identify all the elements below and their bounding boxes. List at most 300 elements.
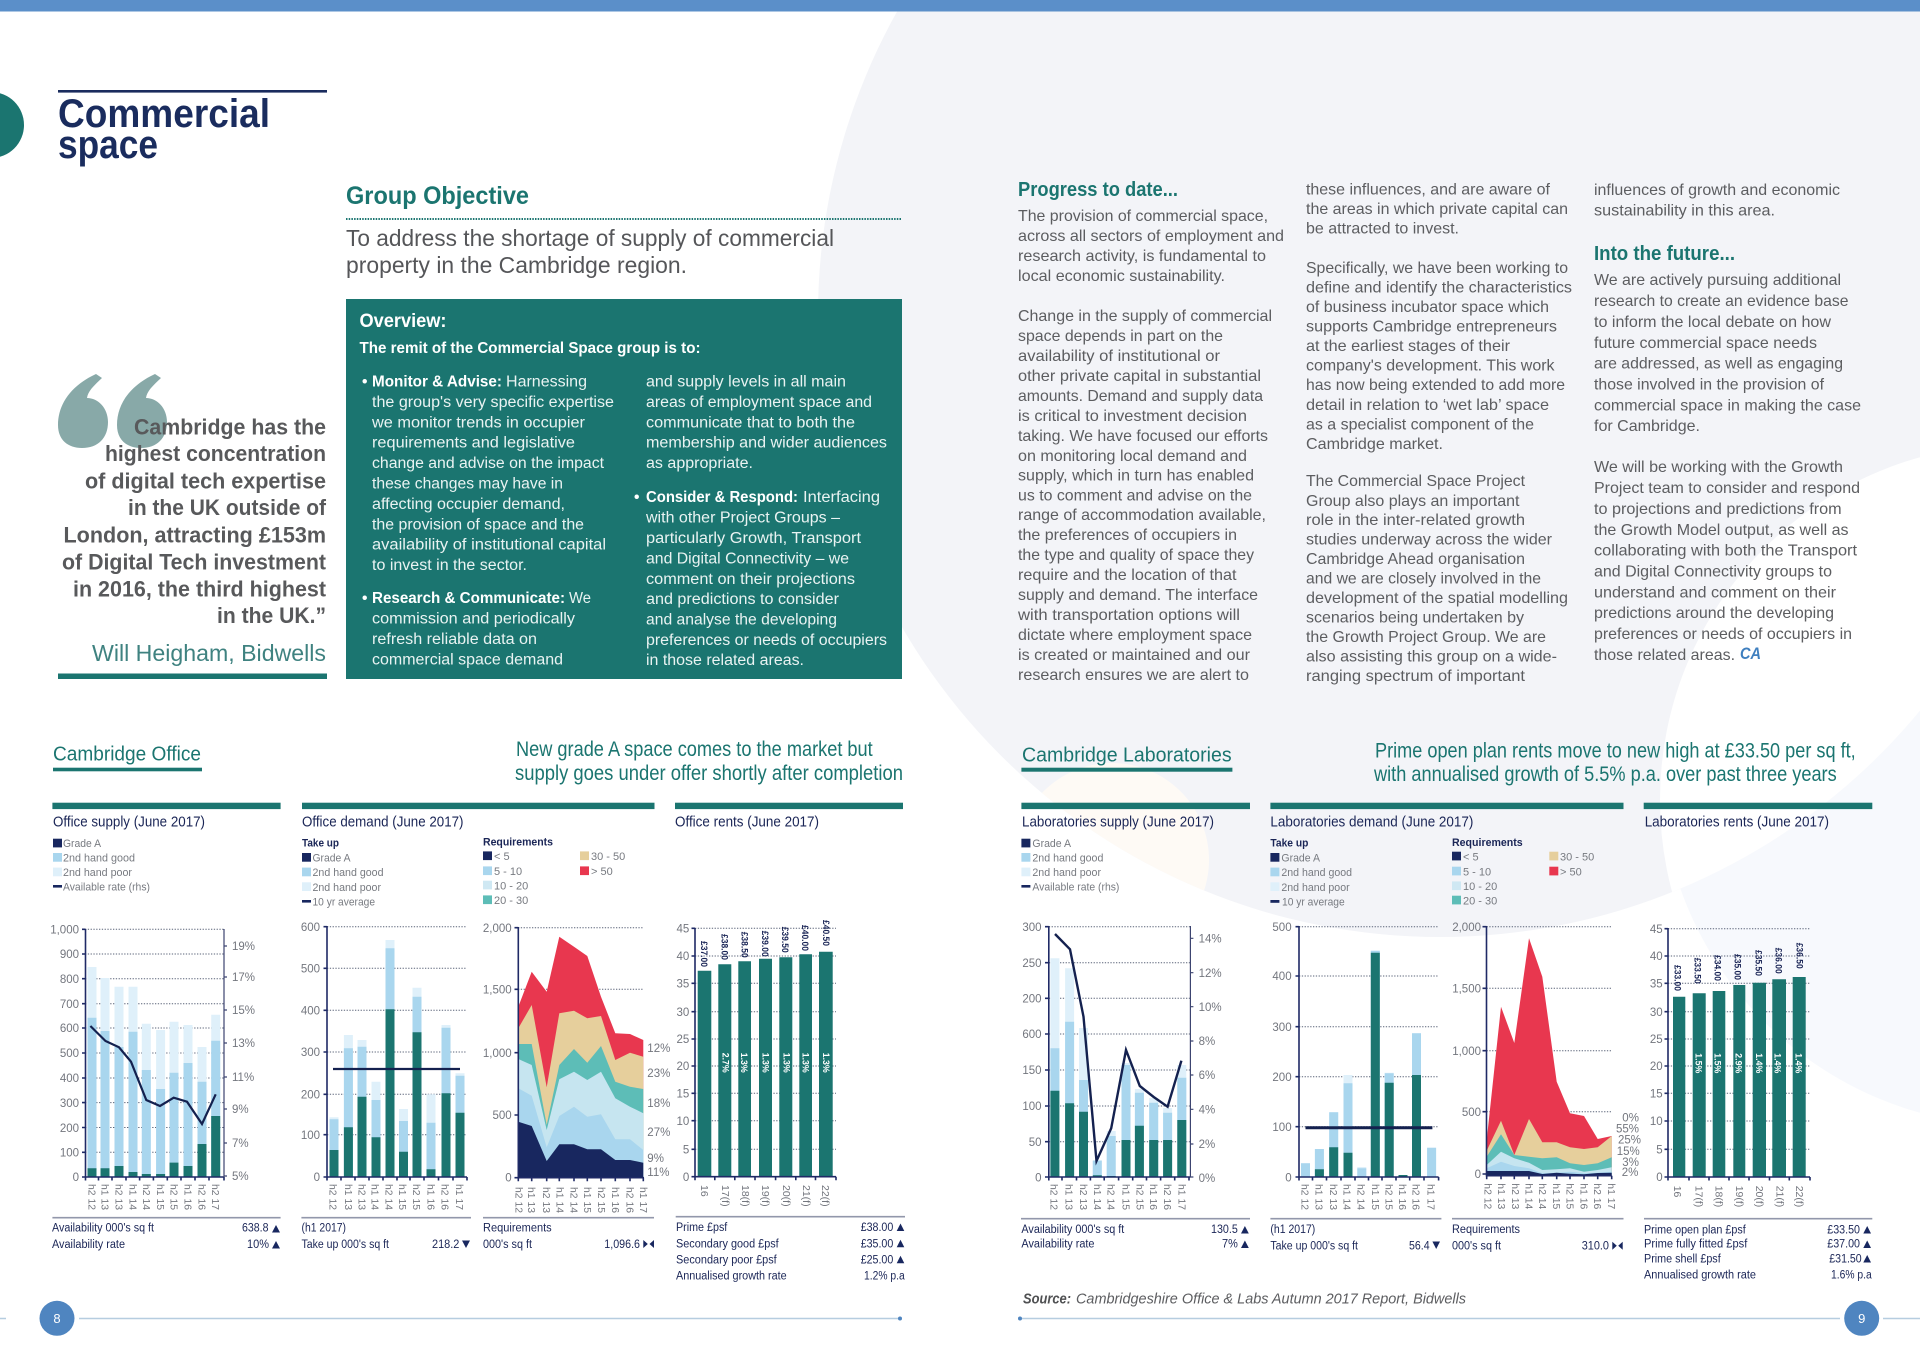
text: progress to date: require and the location of that	[1018, 567, 1237, 584]
text: into the future: commercial space in making the case	[1594, 398, 1861, 414]
bar chart: office supply: 200	[60, 1123, 79, 1135]
text: progress to date: range of accommodation available,	[1018, 507, 1266, 524]
panel: overview: Harnessing	[506, 374, 587, 390]
bar chart: laboratories supply: 50	[1029, 1137, 1042, 1149]
panel: overview: the provision of space and the	[372, 516, 584, 533]
text: progress column 2: also assisting this group on a wide-	[1306, 648, 1557, 666]
text: progress column 2: of business incubator space which	[1306, 299, 1549, 316]
text: into the future: sustainability in this area.	[1594, 202, 1775, 220]
panel: overview: and predictions to consider	[646, 591, 839, 608]
stats: office demand: Take up 000's sq ft	[302, 1239, 390, 1251]
bar chart: office supply: 19%	[232, 941, 255, 953]
bar chart: laboratories rents: 22(f)	[1793, 1186, 1805, 1207]
legend: requirements	[483, 837, 625, 907]
title	[58, 90, 327, 167]
panel: overview: membership and wider audiences	[646, 435, 887, 452]
bar chart: laboratories supply: 100	[1022, 1101, 1042, 1113]
area chart: laboratories requirements: h2 15	[1564, 1183, 1576, 1209]
bar chart: laboratories supply: h1 17	[1175, 1184, 1187, 1210]
bar chart: laboratories rents: 1.4%	[1773, 1053, 1783, 1073]
area chart: office requirements: h2 13	[540, 1187, 552, 1213]
bar chart: office rents: 40	[677, 951, 689, 963]
stats: laboratories supply	[1021, 1219, 1250, 1251]
text: progress column 2: company's development. This work	[1306, 358, 1555, 375]
legend: requirements: > 50	[591, 866, 613, 878]
bar chart: office take up: h1 13	[342, 1184, 354, 1210]
area chart: office requirements: h2 16	[624, 1187, 636, 1213]
bar chart: office rents: 15	[677, 1088, 689, 1100]
bar chart: laboratories take up: 100	[1272, 1122, 1292, 1134]
bar chart: laboratories supply: 0	[1035, 1172, 1042, 1184]
panel: overview: We	[569, 590, 591, 607]
bar chart: laboratories supply: h2 16	[1161, 1184, 1173, 1210]
panel: overview	[346, 299, 902, 679]
text: progress to date: us to comment and advise on the	[1018, 488, 1252, 504]
bar chart: office supply: h1 13	[98, 1184, 110, 1210]
legend: 2nd hand good	[1032, 852, 1103, 864]
bar chart: laboratories supply: 4%	[1199, 1104, 1215, 1116]
text: progress column 2: supports Cambridge entrepreneurs	[1306, 319, 1557, 336]
group objective: To address the shortage of supply of commercial	[346, 225, 834, 251]
text: progress to date: is critical to investment decision	[1018, 408, 1247, 425]
text: progress to date: with transportation options will	[1017, 607, 1240, 624]
legend: take up: 10 yr average	[312, 896, 375, 908]
bar chart: office rents: 20(f)	[780, 1185, 792, 1207]
area chart: office requirements: h1 13	[525, 1187, 537, 1213]
text: into the future: understand and comment on their	[1594, 584, 1837, 602]
text: into the future: Into the future...	[1594, 243, 1735, 265]
legend: take up: Take up	[1270, 838, 1309, 850]
bar chart: office rents: 1.3%	[801, 1053, 811, 1073]
text: progress to date: amounts. Demand and supply data	[1018, 388, 1263, 405]
bar chart: laboratories rents: £36.50	[1793, 943, 1804, 969]
title: space	[58, 123, 158, 167]
bar chart: laboratories supply: h1 13	[1063, 1184, 1075, 1210]
text: progress column 2	[1306, 182, 1572, 685]
text: into the future: collaborating with both the Transport	[1594, 543, 1858, 560]
bar chart: office take up: 100	[301, 1130, 320, 1142]
panel: overview: •	[634, 489, 639, 506]
text: into the future: the Growth Model output, as well as	[1594, 522, 1848, 539]
area chart: office requirements: 23%	[647, 1068, 670, 1080]
legend: take up: 2nd hand good	[312, 867, 384, 879]
legend: requirements: 20 - 30	[494, 895, 528, 907]
bar chart: laboratories rents: 18(f)	[1712, 1186, 1724, 1207]
legend: requirements: 30 - 50	[1560, 851, 1594, 863]
stats: laboratories rents: £37.00	[1827, 1239, 1860, 1251]
text: progress to date: Change in the supply of commercial	[1018, 308, 1272, 325]
bar chart: office supply: 400	[60, 1073, 79, 1085]
bar chart: office rents: 17(f)	[719, 1185, 731, 1207]
stats: office supply: Availability rate	[52, 1239, 125, 1251]
legend: requirements: Requirements	[1452, 837, 1523, 849]
bar chart: laboratories supply: 2%	[1199, 1139, 1215, 1151]
bar chart: laboratories take up: 0	[1285, 1172, 1292, 1184]
stats: laboratories rents: £33.50	[1827, 1224, 1860, 1236]
bar chart: laboratories rents: 1.4%	[1754, 1053, 1764, 1073]
stats: laboratories demand: 310.0	[1582, 1240, 1609, 1252]
page footer left	[0, 1301, 902, 1336]
bar chart: laboratories rents: £34.00	[1711, 955, 1722, 981]
area chart: laboratories requirements: h1 13	[1495, 1183, 1507, 1209]
panel: overview: Consider & Respond:	[646, 489, 798, 506]
stats: laboratories rents: 1.6% p.a	[1831, 1270, 1872, 1282]
legend: take up: Grade A	[1281, 852, 1321, 864]
legend: requirements: < 5	[1463, 851, 1479, 863]
bar chart: office take up: h2 13	[356, 1184, 368, 1210]
bar chart: office rents: 0	[683, 1172, 689, 1184]
area chart: laboratories requirements: h1 17	[1605, 1183, 1617, 1209]
stats: office supply: 638.8	[242, 1223, 268, 1235]
area chart: office requirements: 0	[505, 1172, 512, 1184]
text: progress column 2: ranging spectrum of important	[1306, 668, 1526, 685]
bar chart: office take up: 600	[301, 922, 320, 934]
panel: overview: The remit of the Commercial Space group is to:	[360, 340, 700, 357]
stats: office demand: 1,096.6	[604, 1239, 640, 1251]
legend: Available rate (rhs)	[63, 882, 150, 894]
bar chart: office rents: 21(f)	[800, 1185, 812, 1207]
bar chart: laboratories rents: 2.9%	[1734, 1053, 1744, 1073]
panel: overview: Monitor & Advise:	[372, 374, 502, 390]
text: progress to date: supply, which in turn has enabled	[1018, 468, 1254, 484]
bar chart: office supply: h2 16	[196, 1184, 208, 1210]
bar chart: laboratories rents: 10	[1650, 1116, 1663, 1128]
bar chart: office take up: h2 14	[382, 1184, 394, 1210]
area chart: office requirements: 11%	[647, 1167, 669, 1179]
area chart: laboratories requirements: 500	[1462, 1107, 1481, 1119]
bar chart: office rents: 2.7%	[721, 1053, 731, 1073]
page footer right: 9	[1858, 1311, 1865, 1326]
bar chart: laboratories take up: 500	[1272, 922, 1292, 934]
stats: laboratories demand: (h1 2017)	[1270, 1224, 1315, 1236]
stats: laboratories demand: Take up 000's sq ft	[1270, 1240, 1359, 1252]
text: progress to date: availability of institutional or	[1018, 348, 1221, 365]
bar chart: office rents: £38.50	[738, 932, 749, 958]
bar chart: office supply: 15%	[232, 1005, 255, 1017]
legend: take up: 2nd hand poor	[312, 882, 381, 894]
panel: overview: affecting occupier demand,	[372, 496, 565, 513]
bar chart: laboratories supply: 10%	[1199, 1002, 1222, 1014]
text: progress column 2: detail in relation to ‘wet lab’ space	[1306, 397, 1549, 414]
panel: overview: •	[362, 374, 367, 390]
bar chart: office take up: h2 12	[326, 1184, 338, 1210]
area chart: laboratories requirements: 2%	[1622, 1167, 1638, 1179]
bar chart: office supply: 500	[60, 1048, 79, 1060]
bar chart: laboratories rents: 0	[1656, 1172, 1663, 1184]
area chart: laboratories requirements: 1,000	[1452, 1046, 1481, 1058]
text: progress to date: The provision of commercial space,	[1018, 208, 1268, 225]
panel: office rents: Office rents (June 2017)	[675, 815, 819, 831]
bar chart: office rents: £38.00	[718, 934, 729, 960]
area chart: office requirements: h2 12	[512, 1187, 524, 1213]
bar chart: laboratories supply: 150	[1022, 1065, 1042, 1077]
text: into the future: We are actively pursuing additional	[1594, 272, 1841, 289]
stats: laboratories supply: Availability rate	[1021, 1239, 1094, 1251]
stats: office demand: 000's sq ft	[483, 1239, 533, 1251]
panel: overview: areas of employment space and	[646, 394, 872, 411]
bar chart: laboratories rents: 35	[1650, 978, 1663, 990]
panel: laboratories demand	[1270, 803, 1641, 1252]
pull quote: highest concentration	[105, 441, 326, 466]
bar chart: laboratories rents: 20	[1650, 1061, 1663, 1073]
bar chart: laboratories supply: h1 16	[1147, 1184, 1159, 1210]
text: progress column 2: the Growth Project Group. We are	[1306, 629, 1546, 646]
bar chart: office rents: 5	[683, 1144, 689, 1156]
stats: laboratories rents: Prime open plan £psf	[1644, 1224, 1746, 1236]
bar chart: laboratories supply: 14%	[1199, 934, 1222, 946]
legend: 2nd hand good	[63, 852, 135, 864]
pull quote: of Digital Tech investment	[62, 549, 326, 574]
heading: Cambridge Laboratories: Cambridge Laboratories	[1022, 744, 1232, 766]
text: progress to date: local economic sustainability.	[1018, 268, 1225, 285]
legend: Available rate (rhs)	[1032, 882, 1119, 894]
stats: laboratories rents: £31.50	[1829, 1253, 1862, 1265]
headline: laboratories: Prime open plan rents move to new high at £33.50 per sq ft,	[1375, 739, 1856, 762]
bar chart: office rents: £39.00	[759, 931, 770, 957]
bar chart: office supply: 100	[60, 1148, 79, 1160]
text: progress column 2: Group also plays an important	[1306, 493, 1520, 510]
bar chart: office take up: 200	[301, 1090, 320, 1102]
text: progress to date: research ensures we are alert to	[1018, 667, 1249, 684]
headline: office: supply goes under offer shortly after completion	[515, 762, 903, 785]
bar chart: laboratories take up: h2 14	[1354, 1184, 1366, 1210]
bar chart: office supply: 1,000	[50, 924, 79, 936]
bar chart: laboratories supply: h1 15	[1120, 1184, 1132, 1210]
area chart: office requirements	[483, 923, 670, 1213]
bar chart: office rents: 45	[677, 924, 689, 936]
bar chart: office rents: 30	[677, 1007, 689, 1019]
bar chart: laboratories take up: h1 16	[1396, 1184, 1408, 1210]
area chart: laboratories requirements: 25%	[1618, 1134, 1641, 1146]
stats: office rents: 1.2% p.a	[864, 1271, 905, 1283]
panel: office supply: Office supply (June 2017)	[53, 815, 205, 831]
text: progress column 2: The Commercial Space Project	[1306, 473, 1526, 490]
group objective: Group Objective	[346, 182, 529, 210]
area chart: office requirements: 1,500	[483, 984, 512, 996]
bar chart: laboratories supply	[1022, 922, 1222, 1210]
legend: requirements: 30 - 50	[591, 851, 625, 863]
legend: take up: 10 yr average	[1282, 896, 1345, 908]
bar chart: laboratories rents: 16	[1671, 1186, 1683, 1198]
bar chart: laboratories rents: £35.50	[1752, 950, 1763, 976]
area chart: office requirements: h2 14	[568, 1187, 580, 1213]
bar chart: office supply: h2 14	[140, 1184, 152, 1210]
panel: overview: Overview:	[360, 311, 446, 332]
text: into the future: for Cambridge.	[1594, 418, 1700, 435]
panel: overview: Interfacing	[803, 489, 880, 506]
bar chart: laboratories supply: h2 13	[1077, 1184, 1089, 1210]
stats: office demand: (h1 2017)	[302, 1223, 346, 1235]
bar chart: laboratories take up: 300	[1272, 1022, 1292, 1034]
stats: laboratories demand: Requirements	[1452, 1224, 1520, 1236]
bar chart: office supply: h2 12	[86, 1184, 98, 1210]
panel: office rents	[675, 803, 905, 1283]
stats: office rents: Annualised growth rate	[676, 1271, 787, 1283]
icon: quotation mark	[58, 374, 167, 448]
text: into the future	[1594, 182, 1861, 664]
legend: requirements: 5 - 10	[494, 866, 522, 878]
stats: office rents: Secondary good £psf	[676, 1238, 779, 1250]
legend: requirements: 5 - 10	[1463, 866, 1491, 878]
bar chart: laboratories supply: h1 14	[1091, 1184, 1103, 1210]
area chart: office requirements: 12%	[647, 1043, 670, 1055]
area chart: laboratories requirements: h1 14	[1522, 1183, 1534, 1209]
text: progress to date: the type and quality of space they	[1018, 547, 1254, 564]
legend: 2nd hand poor	[63, 867, 132, 879]
stats: laboratories supply: 7%	[1222, 1239, 1238, 1251]
panel: office supply	[50, 803, 281, 1251]
bar chart: office take up: 0	[314, 1172, 320, 1184]
text: progress to date: on monitoring local demand and	[1018, 448, 1247, 465]
stats: office rents: £35.00	[861, 1238, 893, 1250]
group objective: property in the Cambridge region.	[346, 252, 687, 278]
text: progress column 2: studies underway across the wider	[1306, 532, 1553, 549]
bar chart: laboratories take up: h1 13	[1312, 1184, 1324, 1210]
stats: laboratories rents: Prime shell £psf	[1644, 1253, 1721, 1265]
text: progress column 2: development of the spatial modelling	[1306, 590, 1568, 607]
bar chart: laboratories supply: h2 14	[1105, 1184, 1117, 1210]
stats: office rents: Prime £psf	[676, 1222, 728, 1234]
bar chart: laboratories rents: 17(f)	[1692, 1186, 1704, 1207]
legend: take up: Take up	[302, 838, 339, 850]
panel: overview: preferences or needs of occupiers	[646, 632, 887, 649]
bar chart: office take up: 400	[301, 1006, 320, 1018]
panel: overview: and Digital Connectivity – we	[646, 550, 849, 567]
pull quote: in the UK outside of	[128, 495, 326, 520]
bar chart: office supply: 600	[60, 1023, 79, 1035]
bar chart: office supply: 5%	[232, 1171, 249, 1183]
legend: take up	[1270, 838, 1352, 908]
bar chart: laboratories rents: 30	[1650, 1007, 1663, 1019]
text: progress column 2: has now being extended to add more	[1306, 377, 1565, 394]
text: progress column 2: as a specialist component of the	[1306, 416, 1534, 434]
area chart: office requirements: 1,000	[483, 1048, 512, 1060]
bar chart: office supply: h2 13	[112, 1184, 124, 1210]
stats: office rents: £25.00	[861, 1254, 893, 1266]
text: progress column 2: role in the inter-related growth	[1306, 512, 1525, 529]
text: into the future: are addressed, as well as engaging	[1594, 356, 1843, 372]
text: into the future: to projections and predictions from	[1594, 501, 1842, 518]
bar chart: office rents: 1.3%	[782, 1053, 792, 1073]
bar chart: office take up: h1 15	[396, 1184, 408, 1210]
heading: Cambridge Office: Cambridge Office	[53, 744, 201, 766]
panel: overview: particularly Growth, Transport	[646, 530, 862, 547]
stats: laboratories demand: 56.4	[1409, 1240, 1430, 1252]
bar chart: office rents: 1.3%	[739, 1053, 749, 1073]
source note: Source:	[1023, 1290, 1071, 1307]
area chart: laboratories requirements: 3%	[1622, 1157, 1639, 1169]
bar chart: office rents: £39.50	[779, 927, 790, 953]
bar chart: laboratories take up: 200	[1272, 1072, 1292, 1084]
text: progress to date: dictate where employment space	[1018, 627, 1252, 644]
bar chart: laboratories rents: 5	[1656, 1144, 1663, 1156]
bar chart: laboratories supply: 300	[1022, 922, 1042, 934]
bar chart: office take up: h1 17	[453, 1184, 465, 1210]
bar chart: office supply: 800	[60, 974, 79, 986]
bar chart: office rents: 18(f)	[739, 1185, 751, 1207]
legend: requirements: 10 - 20	[494, 880, 528, 892]
panel: overview: availability of institutional capital	[372, 536, 606, 554]
stats: office rents: Secondary poor £psf	[676, 1254, 777, 1266]
text: into the future: to inform the local debate on how	[1594, 314, 1831, 331]
panel: overview: we monitor trends in occupier	[371, 414, 585, 431]
stats: office demand: 218.2	[432, 1239, 459, 1251]
text: progress to date: across all sectors of employment and	[1018, 228, 1284, 245]
text: progress column 2: Cambridge Ahead organisation	[1306, 551, 1525, 568]
panel: overview: comment on their projections	[646, 571, 855, 588]
stats: office supply: 10%	[247, 1239, 269, 1251]
bar chart: office rents	[677, 920, 836, 1207]
bar chart: office take up: h2 15	[410, 1184, 422, 1210]
stats: laboratories rents: Prime fully fitted £psf	[1644, 1239, 1748, 1251]
bar chart: laboratories rents: 1.5%	[1713, 1053, 1723, 1073]
text: into the future: We will be working with the Growth	[1594, 459, 1843, 476]
headline: laboratories	[1373, 739, 1856, 786]
area chart: office requirements: 2,000	[483, 923, 512, 935]
panel: overview: •	[362, 590, 367, 607]
area chart: laboratories requirements	[1452, 922, 1641, 1209]
headline: office: New grade A space comes to the market but	[516, 738, 873, 761]
text: progress column 2: be attracted to invest.	[1306, 220, 1459, 238]
bar chart: laboratories rents: 1.4%	[1794, 1053, 1804, 1073]
text: into the future: those involved in the provision of	[1594, 376, 1825, 394]
panel: overview: as appropriate.	[646, 455, 753, 472]
area chart: laboratories requirements: h2 16	[1591, 1183, 1603, 1209]
pull quote: in the UK.”	[217, 603, 326, 628]
area chart: laboratories requirements: h2 14	[1536, 1183, 1548, 1209]
bar chart: laboratories take up: h2 16	[1410, 1184, 1422, 1210]
panel: office demand	[301, 803, 670, 1251]
text: progress column 2: scenarios being undertaken by	[1306, 610, 1524, 626]
bar chart: laboratories rents: 40	[1650, 951, 1663, 963]
text: progress column 2: at the earliest stages of their	[1306, 338, 1511, 355]
text: progress column 2: Specifically, we have been working to	[1306, 260, 1568, 277]
area chart: laboratories requirements: 15%	[1617, 1146, 1640, 1158]
bar chart: office supply: 0	[73, 1172, 79, 1184]
bar chart: laboratories take up: h1 15	[1369, 1184, 1381, 1210]
bar chart: laboratories take up: h1 14	[1340, 1184, 1352, 1210]
bar chart: office supply: 13%	[232, 1038, 255, 1050]
bar chart: laboratories rents: £33.00	[1671, 965, 1682, 991]
text: progress to date: the preferences of occupiers in	[1018, 527, 1237, 544]
text: progress to date: is created or maintained and our	[1018, 647, 1251, 664]
area chart: laboratories requirements: 1,500	[1452, 984, 1481, 996]
source note: Cambridgeshire Office & Labs Autumn 2017 Report, Bidwells	[1076, 1290, 1466, 1307]
legend: take up: Grade A	[312, 852, 351, 864]
pull quote: London, attracting £153m	[64, 522, 326, 547]
panel: overview: commercial space demand	[372, 652, 563, 668]
bar chart: office supply	[50, 924, 255, 1210]
legend: Grade A	[63, 838, 102, 850]
bar chart: laboratories take up: h2 12	[1298, 1184, 1310, 1210]
bar chart: office rents: 1.3%	[821, 1053, 831, 1073]
legend: take up	[302, 838, 384, 908]
bar chart: office supply: 9%	[232, 1104, 249, 1116]
panel: laboratories demand: Laboratories demand (June 2017)	[1270, 815, 1473, 831]
stats: laboratories supply: Availability 000's sq ft	[1021, 1224, 1125, 1236]
panel: overview: communicate that to both the	[646, 414, 855, 431]
bar chart: laboratories take up: h1 17	[1425, 1184, 1437, 1210]
headline: laboratories: with annualised growth of 5.5% p.a. over past three years	[1373, 763, 1837, 786]
stats: laboratories supply: 130.5	[1211, 1224, 1238, 1236]
legend: requirements: < 5	[494, 851, 510, 863]
text: progress column 2: and we are closely involved in the	[1306, 570, 1541, 588]
bar chart: laboratories supply: 6%	[1199, 1070, 1215, 1082]
bar chart: laboratories supply: 600	[1022, 1029, 1042, 1041]
text: progress to date: space depends in part on the	[1018, 328, 1223, 345]
stats: office supply: Availability 000's sq ft	[52, 1223, 155, 1235]
text: into the future: predictions around the developing	[1594, 605, 1834, 622]
